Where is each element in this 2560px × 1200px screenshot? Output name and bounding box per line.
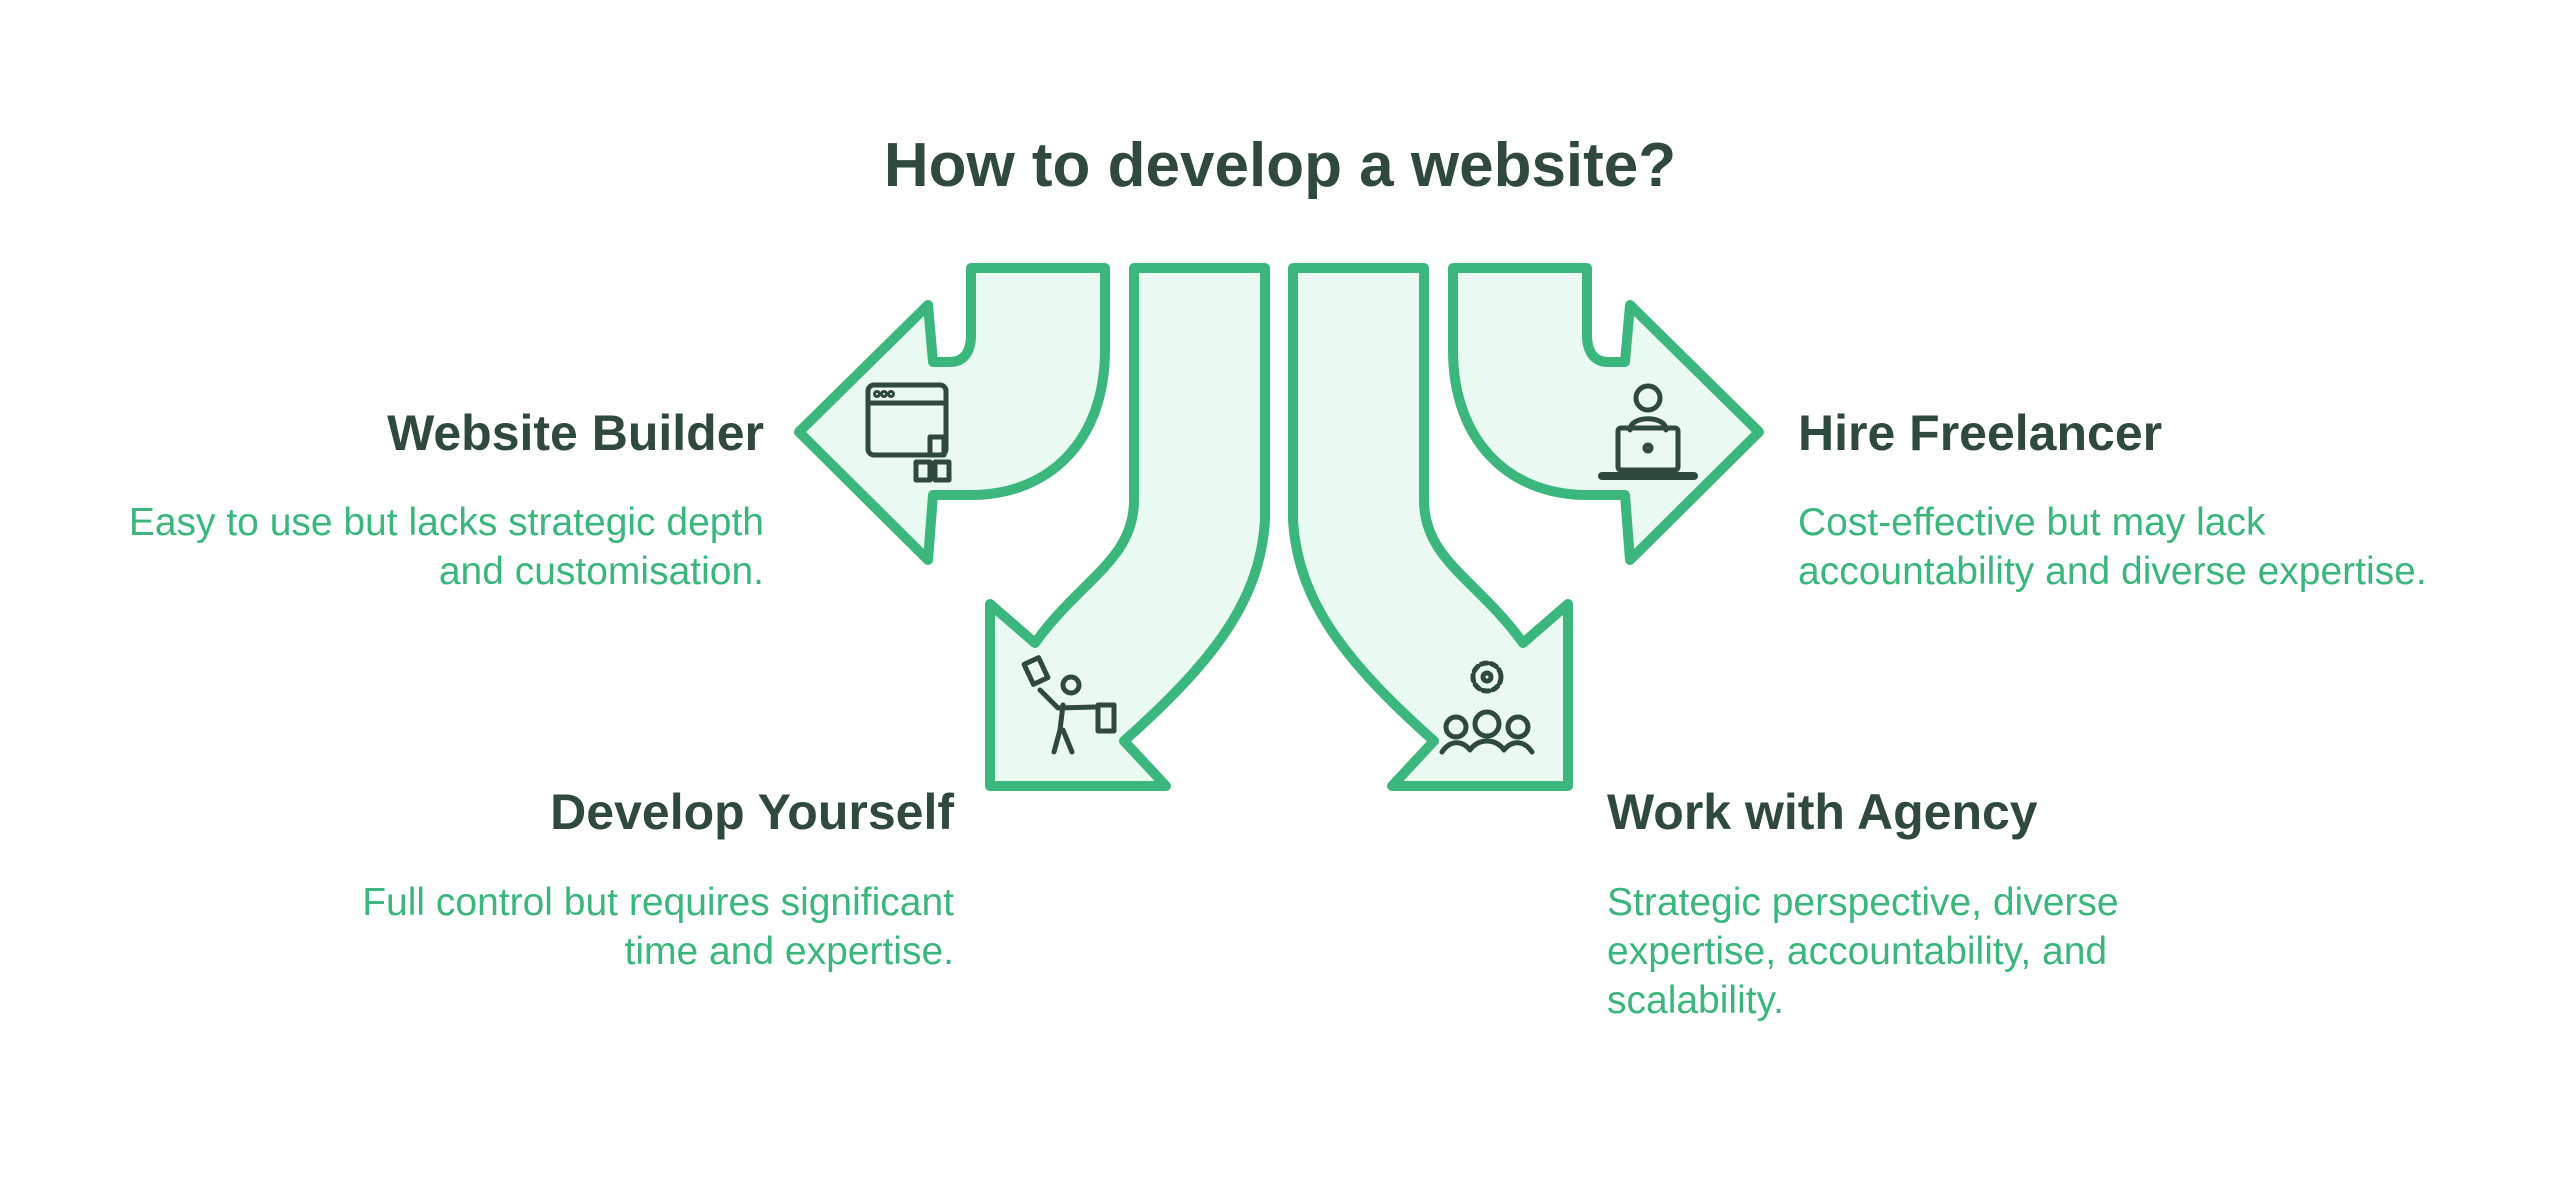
text: work with agency: Strategic perspective, diverse (1607, 881, 2119, 924)
text: work with agency: expertise, accountability, and (1607, 930, 2107, 973)
icon: browser blocks (868, 385, 949, 480)
icon: freelancer laptop (1602, 386, 1694, 476)
icon: climbing person (1024, 658, 1114, 752)
arrow: work with agency (1293, 268, 1568, 786)
text: website builder: Easy to use but lacks strategic depth (129, 501, 764, 544)
text: develop yourself: time and expertise. (624, 930, 954, 973)
title: How to develop a website? (884, 131, 1676, 200)
heading: work with agency: Work with Agency (1607, 784, 2038, 840)
heading: develop yourself: Develop Yourself (550, 784, 954, 840)
arrow: hire freelancer (1453, 268, 1759, 560)
text: hire freelancer (1798, 501, 2427, 593)
heading: website builder: Website Builder (387, 405, 764, 461)
text: website builder: and customisation. (439, 550, 764, 593)
text: work with agency: scalability. (1607, 979, 1784, 1022)
icon: team gear (1442, 663, 1532, 752)
text: work with agency (1607, 881, 2119, 1022)
text: website builder (129, 501, 764, 593)
heading: hire freelancer: Hire Freelancer (1798, 405, 2162, 461)
text: develop yourself: Full control but requires significant (362, 881, 954, 924)
arrow: website builder (799, 268, 1105, 560)
text: develop yourself (362, 881, 954, 973)
text: hire freelancer: Cost-effective but may lack (1798, 501, 2265, 544)
arrow: develop yourself (990, 268, 1265, 786)
text: hire freelancer: accountability and diverse expertise. (1798, 550, 2427, 593)
